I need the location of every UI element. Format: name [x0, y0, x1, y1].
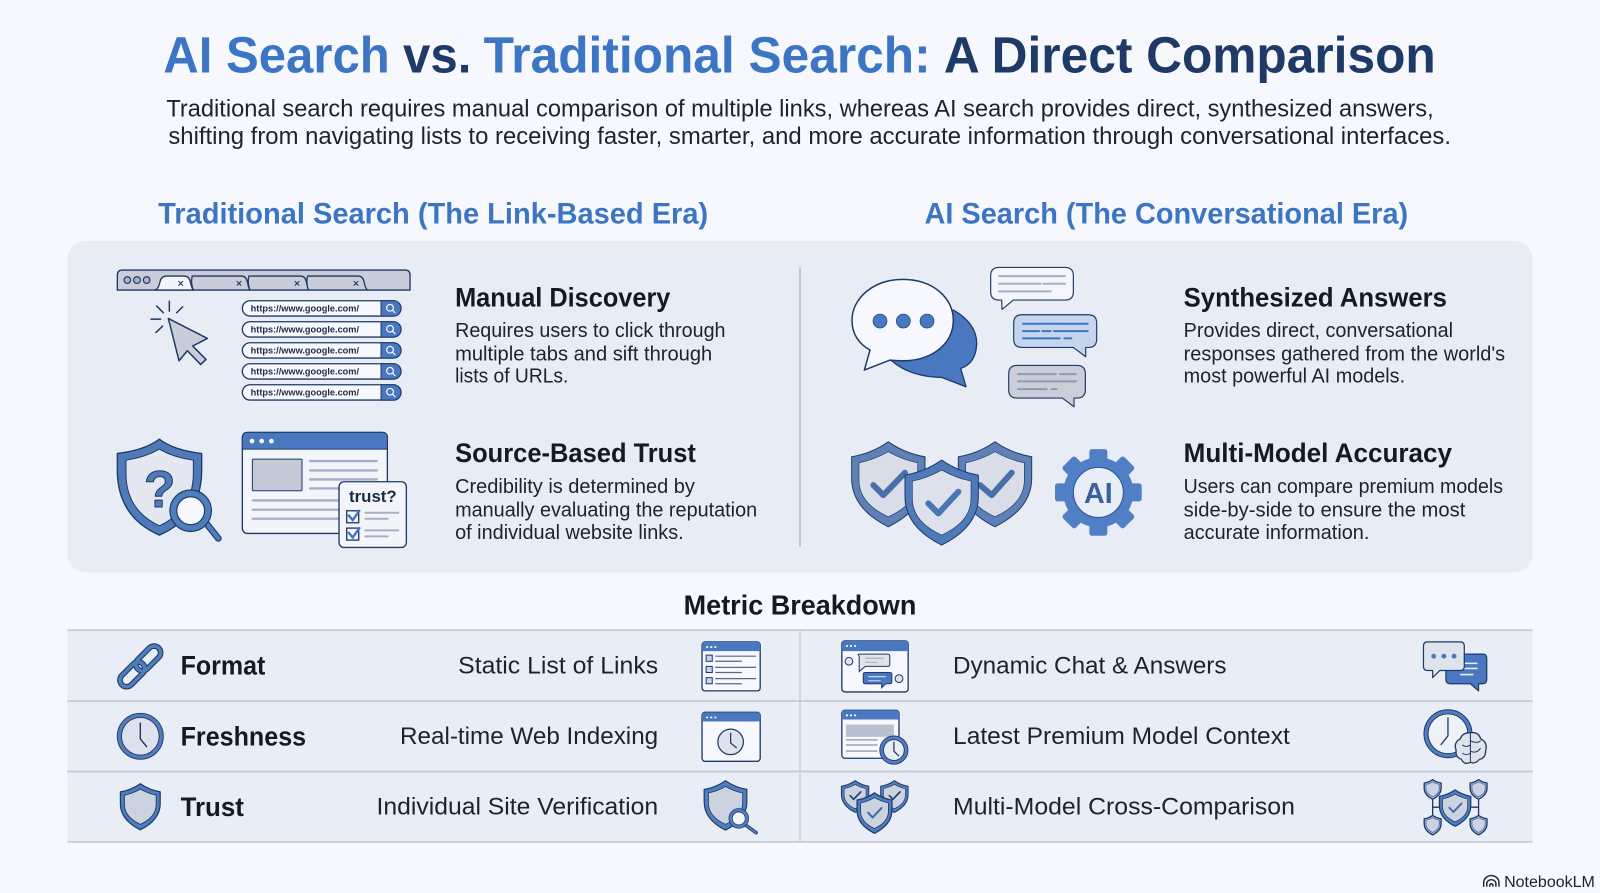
- row: format: Static List of Links: [458, 653, 658, 680]
- row: trust: Trust: [181, 792, 244, 822]
- icon: chain link: [117, 643, 163, 689]
- icon: chat bubbles: [1423, 642, 1487, 691]
- row: freshness: Latest Premium Model Context: [953, 723, 1290, 750]
- icon: three shields with checks and AI gear: AI: [1084, 478, 1113, 510]
- subtitle text block: [166, 95, 1451, 150]
- text block: manual discovery: [455, 283, 726, 388]
- text block: manual discovery: multiple tabs and sift through: [455, 343, 712, 365]
- icon: web page with trust checklist: [242, 432, 406, 547]
- title: vs.: [403, 27, 471, 84]
- watermark: NotebookLM: NotebookLM: [1504, 874, 1595, 891]
- title: Traditional Search:: [484, 27, 931, 84]
- icon: clock and brain: [1426, 712, 1486, 763]
- icon: list window: [702, 642, 760, 691]
- text block: source-based trust: Source-Based Trust: [455, 438, 696, 468]
- icon: browser tabs, URL list and cursor: [117, 270, 410, 400]
- title: AI Search: [163, 27, 390, 84]
- icon: browser tabs, URL list and cursor: https://www.google.com/: [251, 304, 360, 314]
- text block: manual discovery: lists of URLs.: [455, 366, 568, 388]
- icon: shield with question mark and magnifier: [117, 439, 218, 538]
- icon: clock window: [702, 712, 760, 761]
- icon: page with clock: [842, 710, 906, 762]
- row: format: Dynamic Chat & Answers: [953, 653, 1227, 680]
- row: freshness: Real-time Web Indexing: [400, 723, 658, 750]
- text block: synthesized answers: most powerful AI models.: [1184, 366, 1405, 388]
- subtitle text block: Traditional search requires manual comparison of multiple links, whereas AI search provides direct, synthesized answers,: [166, 95, 1434, 122]
- row: format: Format: [181, 651, 265, 681]
- icon: speech bubbles: [852, 267, 1097, 407]
- table: metric breakdown: [67, 630, 1533, 842]
- heading: traditional search column: Traditional Search (The Link-Based Era): [158, 198, 708, 231]
- row: trust: [120, 780, 1487, 835]
- title: [163, 27, 1436, 84]
- icon: shield with question mark and magnifier: ?: [144, 460, 175, 518]
- text block: synthesized answers: [1184, 283, 1505, 388]
- row: format: [117, 641, 1487, 692]
- icon: browser tabs, URL list and cursor: https://www.google.com/: [251, 367, 360, 377]
- text block: manual discovery: Requires users to click through: [455, 320, 726, 342]
- subtitle text block: shifting from navigating lists to receiving faster, smarter, and more accurate information through conversational interfaces.: [168, 123, 1451, 150]
- icon: chat window: [842, 641, 908, 692]
- text block: source-based trust: of individual website links.: [455, 522, 684, 544]
- text block: source-based trust: Credibility is determined by: [455, 476, 695, 498]
- row: trust: Multi-Model Cross-Comparison: [953, 793, 1295, 820]
- title: A Direct Comparison: [944, 27, 1436, 84]
- row: trust: Individual Site Verification: [377, 793, 658, 820]
- text block: multi-model accuracy: Multi-Model Accuracy: [1184, 438, 1452, 468]
- text block: manual discovery: Manual Discovery: [455, 283, 671, 313]
- panel: comparison cards: [67, 241, 1533, 573]
- text block: source-based trust: manually evaluating the reputation: [455, 499, 757, 521]
- heading: AI search column: AI Search (The Conversational Era): [924, 198, 1408, 231]
- icon: shield with magnifier: [704, 781, 756, 833]
- text block: synthesized answers: responses gathered from the world's: [1184, 343, 1505, 365]
- text block: multi-model accuracy: side-by-side to ensure the most: [1184, 499, 1466, 521]
- text block: synthesized answers: Synthesized Answers: [1184, 283, 1447, 313]
- text block: source-based trust: [455, 438, 757, 544]
- icon: shield network: [1424, 780, 1487, 835]
- row: freshness: Freshness: [181, 721, 306, 751]
- text block: multi-model accuracy: [1184, 438, 1503, 544]
- heading: metric breakdown: Metric Breakdown: [684, 589, 916, 620]
- icon: browser tabs, URL list and cursor: https://www.google.com/: [251, 346, 360, 356]
- icon: shield: [120, 784, 160, 830]
- text block: multi-model accuracy: Users can compare premium models: [1184, 476, 1503, 498]
- icon: web page with trust checklist: trust?: [349, 487, 397, 506]
- text block: multi-model accuracy: accurate information.: [1184, 522, 1369, 544]
- icon: browser tabs, URL list and cursor: https://www.google.com/: [251, 325, 360, 335]
- text block: synthesized answers: Provides direct, conversational: [1184, 320, 1453, 342]
- icon: three shields with checks and AI gear: [852, 442, 1142, 545]
- icon: browser tabs, URL list and cursor: https://www.google.com/: [251, 388, 360, 398]
- icon: three small shields: [841, 781, 908, 833]
- row: freshness: [119, 710, 1486, 763]
- icon: clock: [119, 715, 161, 757]
